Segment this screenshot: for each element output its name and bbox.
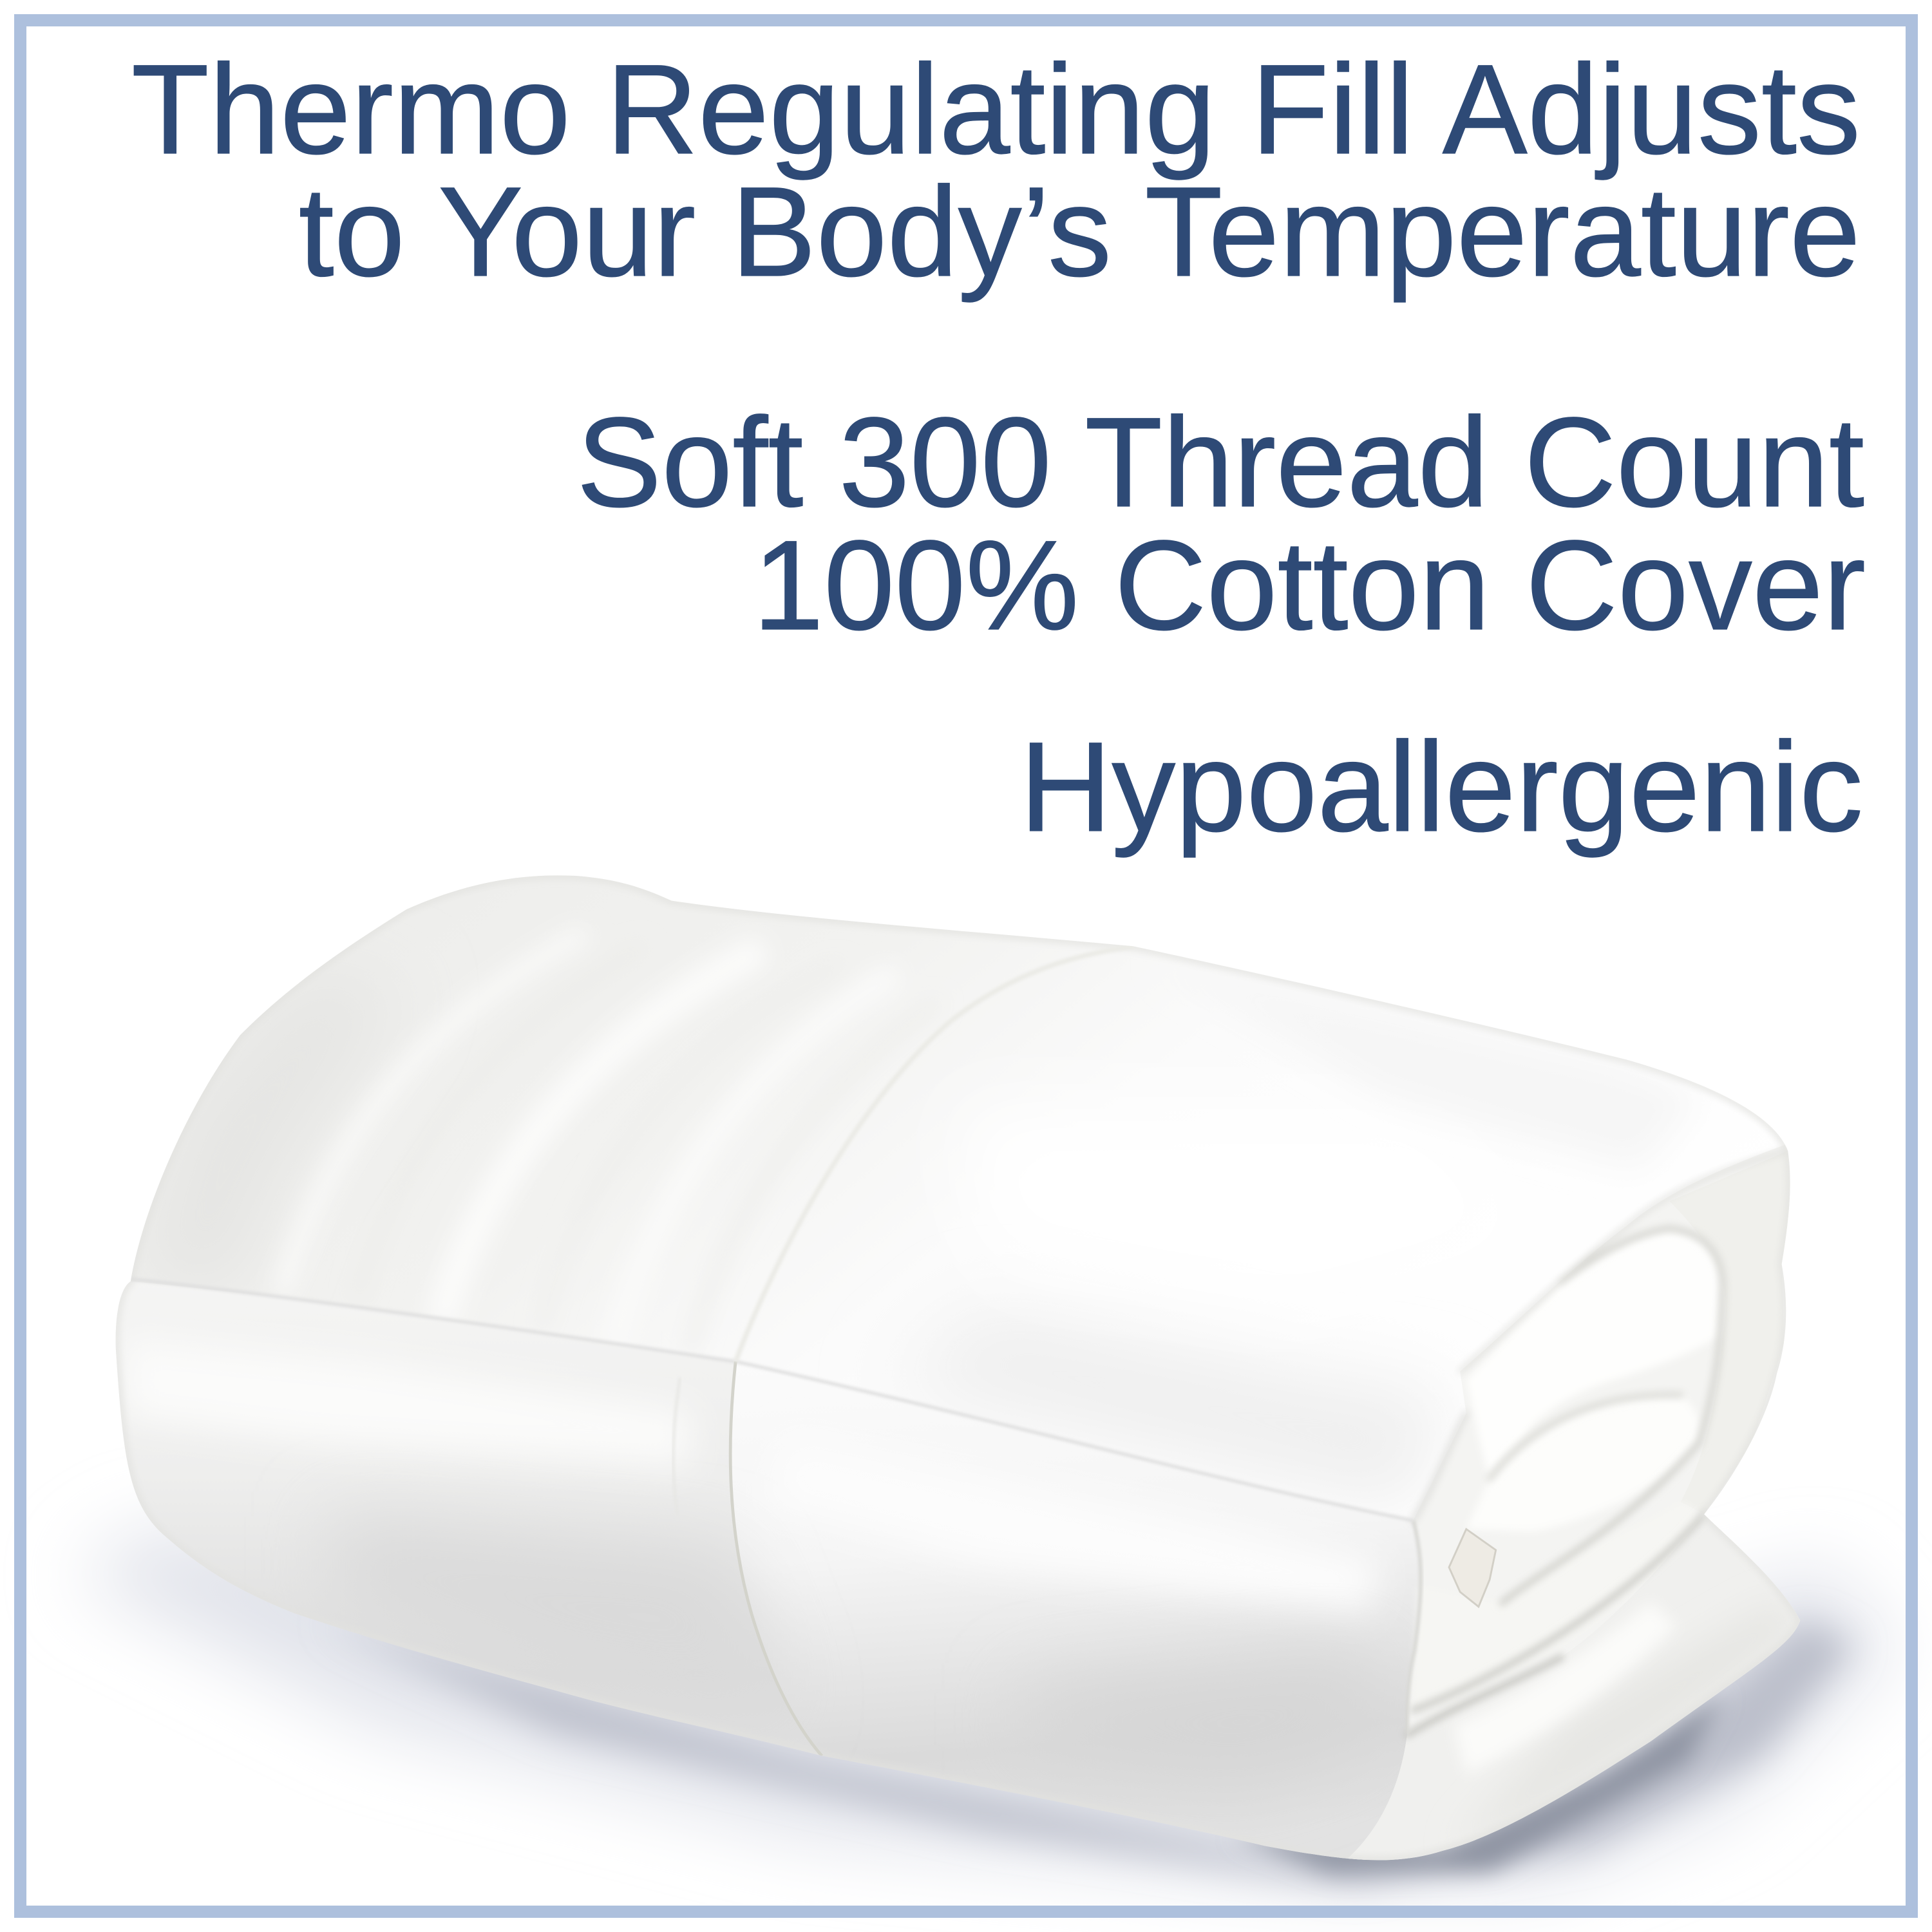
front panel right (730, 1361, 1421, 1867)
top panel fabric streaks (439, 950, 753, 1310)
heading: thermo regulating fill: Thermo Regulating Fill Adjusts (131, 38, 1861, 180)
feature: hypoallergenic: Hypoallergenic (1019, 715, 1863, 858)
heading: body temperature: to Your Body’s Temperature (299, 160, 1861, 303)
vertical quilting seam on top (735, 946, 1133, 1361)
outer top lobe (1669, 1151, 1792, 1514)
horizontal quilting seam (131, 1279, 1414, 1520)
feature: thread count: Soft 300 Thread Count (576, 391, 1864, 533)
inner lobe B (1466, 1229, 1723, 1479)
vertical quilting seam on front (730, 1361, 822, 1756)
tab loop (1449, 1529, 1496, 1607)
front panel right edge crease (1407, 1520, 1421, 1735)
top panel (375, 884, 1778, 1388)
right end folded layers (1347, 1140, 1824, 1873)
lobe D (1414, 1502, 1704, 1710)
top panel soft shading (131, 961, 1700, 1515)
front panel left (138, 1476, 819, 1755)
feature: cotton cover: 100% Cotton Cover (753, 514, 1866, 656)
floor shadow (74, 1528, 1897, 1885)
outline inner edge shading (116, 875, 1800, 1860)
comforter body (99, 862, 1824, 1873)
front panel soft shading (123, 1337, 1380, 1786)
bottom lobe E (1347, 1514, 1800, 1860)
fold creases (1407, 1151, 1788, 1735)
lobe C (1466, 1395, 1701, 1531)
fabric crease on front (674, 1378, 680, 1515)
illustration: rolled white comforter (92, 875, 1895, 1906)
